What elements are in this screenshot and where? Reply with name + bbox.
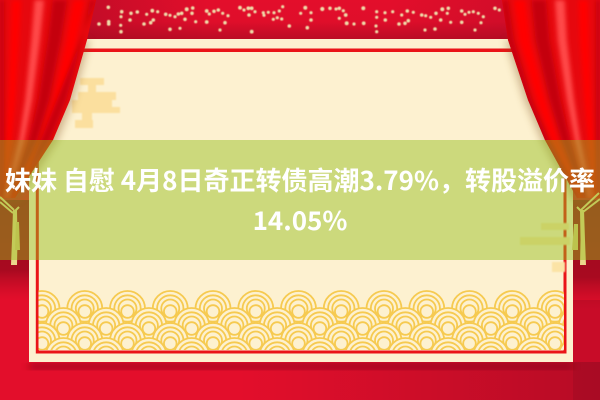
title: 妹妹 自慰 4月8日奇正转债高潮3.79%，转股溢价率 bbox=[5, 161, 595, 198]
title: 14.05% bbox=[253, 201, 347, 238]
left curtain folds bbox=[0, 0, 96, 198]
top red rule bbox=[0, 48, 566, 52]
icon: right cloud ornament bbox=[520, 223, 570, 272]
curtain shadows bbox=[0, 40, 600, 200]
wave scale pattern bbox=[38, 290, 564, 350]
panel shadow bbox=[29, 364, 573, 369]
left curtain bbox=[0, 0, 96, 198]
title bbox=[5, 161, 595, 238]
green title band bbox=[0, 140, 600, 260]
right curtain bbox=[502, 0, 600, 198]
right curtain folds bbox=[502, 0, 600, 198]
gold confetti dots bbox=[97, 5, 501, 34]
icon: left cloud ornament bbox=[72, 78, 120, 128]
right tassel bbox=[572, 193, 600, 265]
left tassel bbox=[0, 197, 20, 265]
frame: red border bbox=[37, 52, 565, 352]
panel: cream card bbox=[0, 39, 573, 362]
